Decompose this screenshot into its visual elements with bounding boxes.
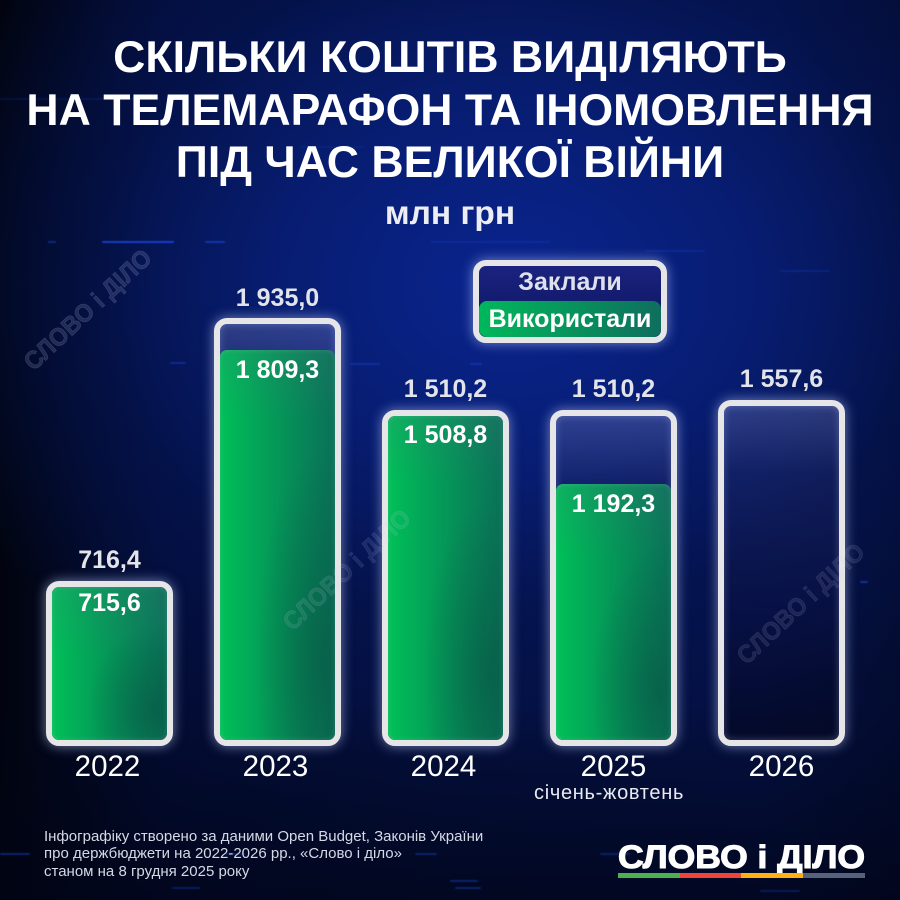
value planned 2025: 1 510,2 — [572, 375, 655, 403]
frame and used bar 2023 — [214, 318, 341, 746]
period note 2025: січень-жовтень — [534, 782, 684, 804]
bar 2025 — [534, 375, 686, 804]
frame and used bar 2024 — [382, 410, 509, 746]
source note: Інфографіку створено за даними Open Budget, Законів України — [44, 828, 483, 844]
legend — [473, 260, 667, 343]
watermark centre: СЛОВО і ДІЛО — [277, 504, 417, 636]
watermark left: СЛОВО і ДІЛО — [18, 244, 158, 376]
source note: про держбюджети на 2022-2026 рр., «Слово і діло» — [44, 845, 402, 862]
year 2022: 2022 — [75, 750, 140, 783]
bar 2023 — [206, 284, 350, 783]
title: ПІД ЧАС ВЕЛИКОЇ ВІЙНИ — [176, 138, 724, 187]
value used 2025: 1 192,3 — [572, 490, 655, 518]
year 2023: 2023 — [243, 750, 308, 783]
legend: used label — [479, 301, 661, 337]
bar 2022 — [37, 546, 182, 783]
frame and used bar 2025 — [550, 410, 677, 746]
value planned 2026: 1 557,6 — [740, 365, 823, 393]
value planned 2022: 716,4 — [78, 546, 141, 574]
value used 2024: 1 508,8 — [404, 421, 487, 449]
subtitle: units: млн грн — [385, 195, 515, 232]
bar 2026 — [710, 365, 854, 783]
year 2026: 2026 — [749, 750, 814, 783]
logo colour strip — [618, 873, 865, 878]
logo — [618, 842, 865, 878]
title — [26, 33, 874, 187]
legend: planned label: Заклали — [518, 268, 622, 296]
value planned 2023: 1 935,0 — [236, 284, 319, 312]
year 2024: 2024 — [411, 750, 476, 783]
bar 2024 — [374, 375, 518, 783]
value used 2023: 1 809,3 — [236, 356, 319, 384]
legend: used label: Використали — [489, 305, 651, 333]
watermark right: СЛОВО і ДІЛО — [731, 538, 871, 670]
value used 2022: 715,6 — [78, 589, 141, 617]
source note: станом на 8 грудня 2025 року — [44, 863, 249, 880]
source note — [44, 828, 483, 880]
title: СКІЛЬКИ КОШТІВ ВИДІЛЯЮТЬ — [113, 33, 787, 82]
value planned 2024: 1 510,2 — [404, 375, 487, 403]
frame 2026 — [718, 400, 845, 746]
title: НА ТЕЛЕМАРАФОН ТА ІНОМОВЛЕННЯ — [26, 86, 874, 134]
frame and used bar 2022 — [46, 581, 173, 746]
year 2025: 2025 — [581, 750, 646, 783]
